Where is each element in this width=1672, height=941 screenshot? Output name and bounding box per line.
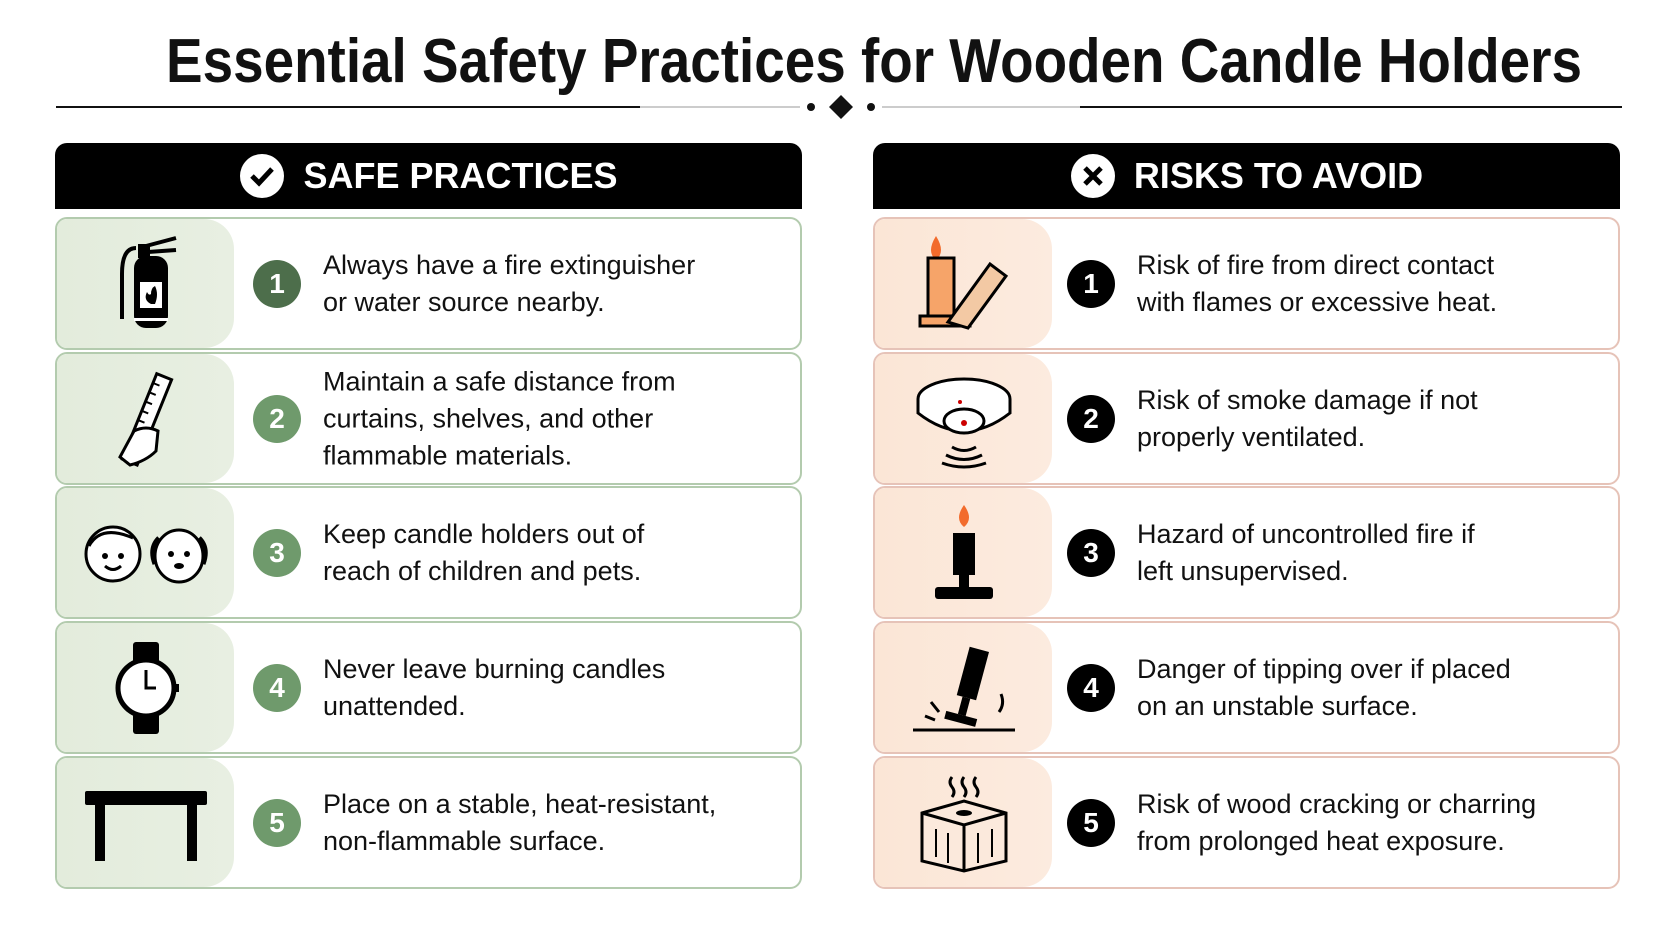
header: safe practices: SAFE PRACTICES (303, 155, 618, 196)
number 2: 2 (1083, 402, 1099, 434)
number 3: 3 (269, 536, 285, 568)
risk 4 (873, 621, 1620, 754)
text (1137, 518, 1475, 586)
safe 4 (55, 621, 802, 754)
icon: candle and wood (875, 219, 1052, 348)
text: Never leave burning candles (323, 654, 665, 684)
risk 3 (873, 486, 1620, 619)
number 1: 1 (269, 268, 285, 298)
text: Risk of fire from direct contact (1137, 250, 1494, 280)
text: unattended. (323, 690, 466, 720)
number 4 (1067, 664, 1115, 712)
risk 2 (873, 352, 1620, 485)
header: risks to avoid: RISKS TO AVOID (1134, 155, 1423, 196)
safe 2 (55, 352, 802, 485)
text: or water source nearby. (323, 286, 605, 316)
text (323, 366, 676, 470)
text: non-flammable surface. (323, 826, 605, 856)
divider with diamond ornament (56, 95, 1622, 119)
text (323, 788, 716, 856)
text: with flames or excessive heat. (1137, 286, 1497, 316)
text (323, 250, 695, 316)
number 5 (253, 798, 301, 846)
text: Always have a fire extinguisher (323, 250, 695, 280)
number 4 (253, 664, 301, 712)
text: from prolonged heat exposure. (1137, 826, 1505, 856)
text: Danger of tipping over if placed (1137, 654, 1511, 684)
text: left unsupervised. (1137, 556, 1349, 586)
icon: child and dog (57, 488, 234, 617)
safe 5 (55, 756, 802, 889)
number 5 (1067, 798, 1115, 846)
text: Place on a stable, heat-resistant, (323, 788, 716, 818)
header: safe practices (55, 143, 802, 209)
text (1137, 788, 1536, 856)
icon: tipping candle (875, 623, 1052, 752)
text: on an unstable surface. (1137, 690, 1418, 720)
number 2: 2 (269, 402, 285, 434)
text: Risk of smoke damage if not (1137, 384, 1478, 414)
number 1 (1067, 260, 1115, 308)
number 5: 5 (269, 806, 285, 838)
number 2 (1067, 394, 1115, 442)
icon: smoke detector (875, 354, 1052, 483)
number 1: 1 (1083, 268, 1099, 298)
number 3 (253, 528, 301, 576)
text: curtains, shelves, and other (323, 403, 653, 433)
icon: watch (57, 623, 234, 752)
text: properly ventilated. (1137, 422, 1365, 452)
number 5: 5 (1083, 806, 1099, 838)
icon: fire extinguisher (57, 219, 234, 348)
text (323, 518, 644, 586)
number 4: 4 (1083, 672, 1099, 702)
text: Maintain a safe distance from (323, 366, 676, 396)
number 3: 3 (1083, 536, 1099, 568)
text: Risk of wood cracking or charring (1137, 788, 1536, 818)
text: Keep candle holders out of (323, 518, 644, 548)
text: flammable materials. (323, 440, 572, 470)
number 4: 4 (269, 672, 285, 702)
text (1137, 384, 1478, 452)
text (1137, 250, 1497, 316)
icon: cracking wood block (875, 758, 1052, 887)
icon: table (57, 758, 234, 887)
text (323, 654, 665, 720)
risk 5 (873, 756, 1620, 889)
header: risks to avoid (873, 143, 1620, 209)
safe 3 (55, 486, 802, 619)
icon: ruler in hand (57, 354, 234, 483)
text: reach of children and pets. (323, 556, 641, 586)
number 1 (253, 260, 301, 308)
number 2 (253, 394, 301, 442)
risk 1 (873, 217, 1620, 350)
text: Hazard of uncontrolled fire if (1137, 518, 1475, 548)
text (1137, 654, 1511, 720)
number 3 (1067, 528, 1115, 576)
icon: candle on stand (875, 488, 1052, 617)
safe 1 (55, 217, 802, 350)
